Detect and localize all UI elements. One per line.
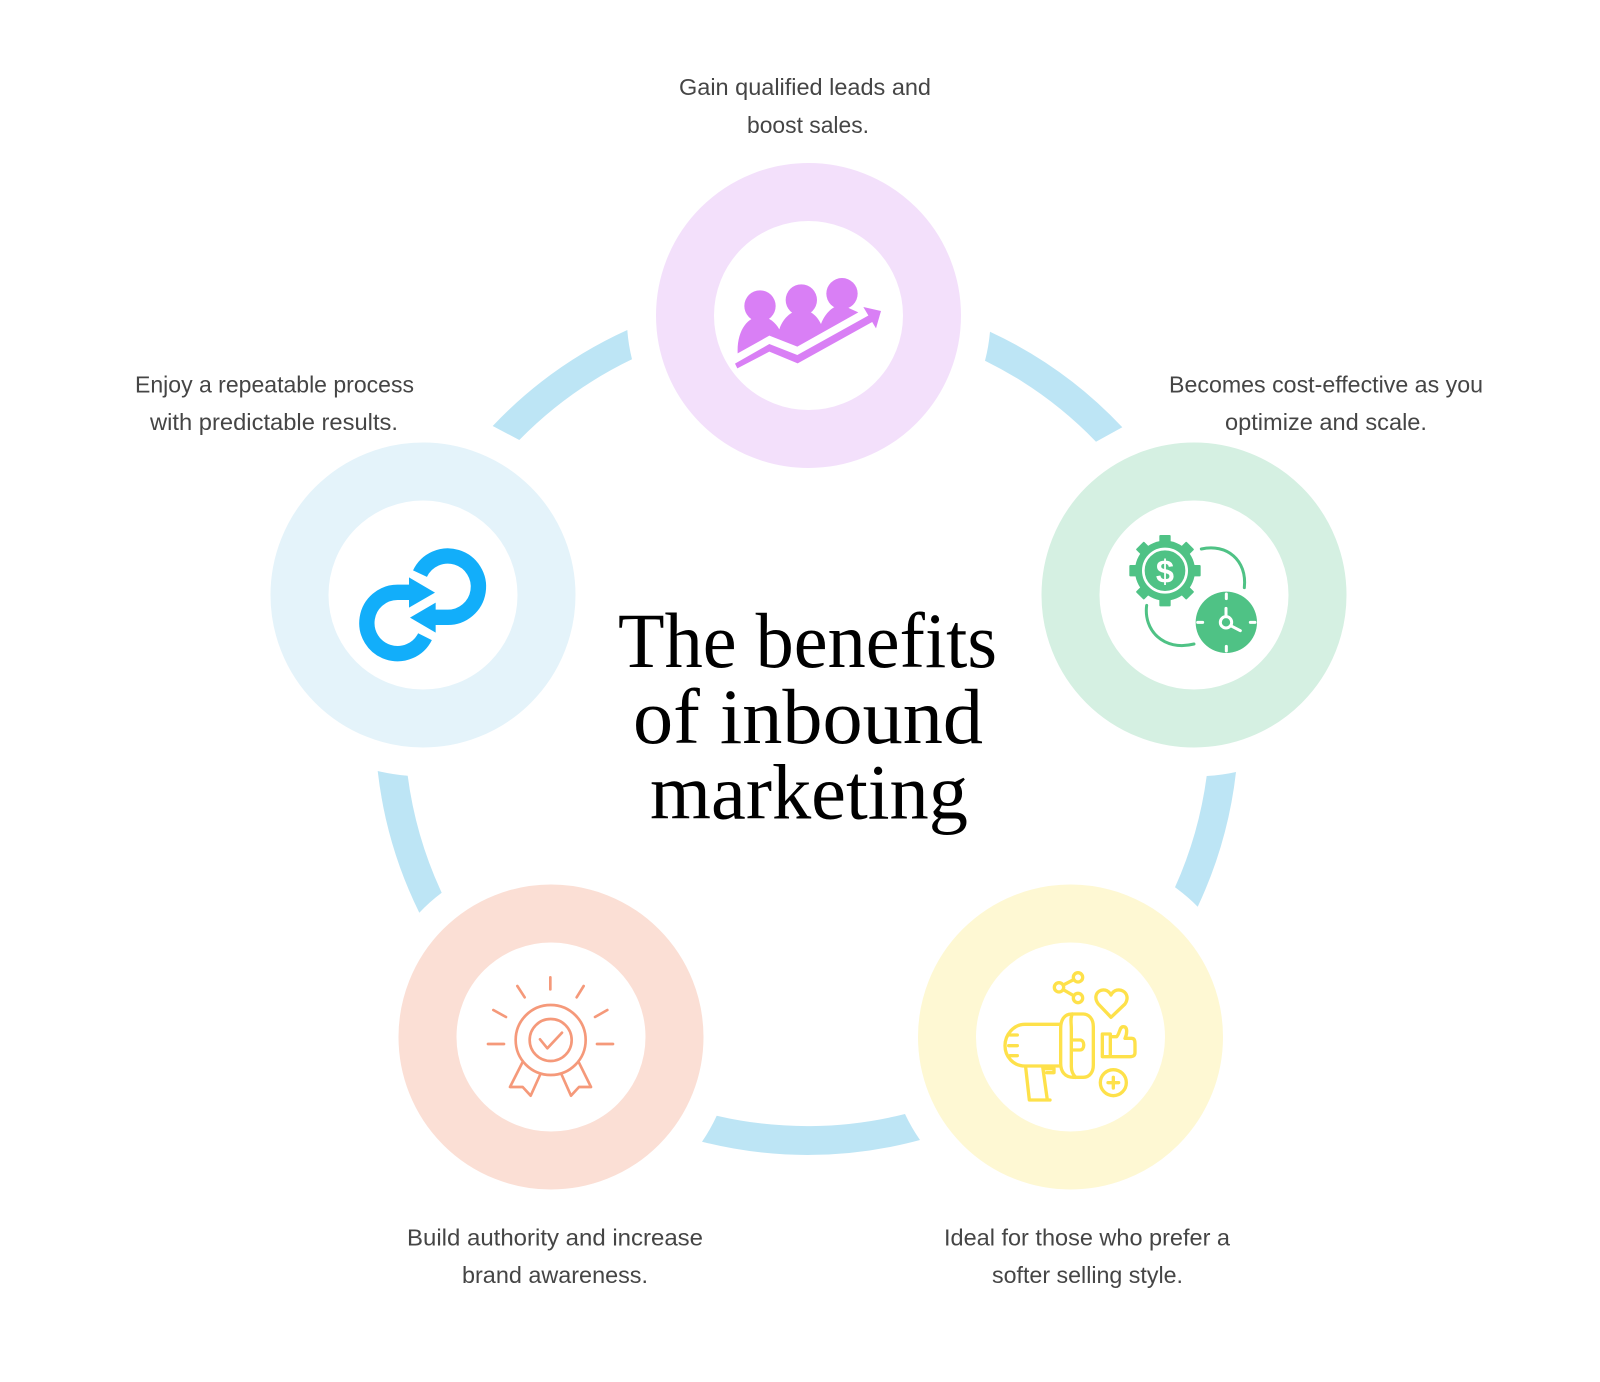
text: cost-effective [1169, 372, 1483, 435]
connector arcs [378, 330, 1236, 1155]
panel: qualified leads [679, 74, 932, 439]
text: qualified leads: boost sales. [747, 112, 869, 138]
text: softer selling [944, 1224, 1231, 1288]
text: cost-effective: optimize and scale. [1225, 409, 1427, 435]
ring: purple [685, 192, 932, 439]
text: repeatable process: with predictable results. [149, 409, 398, 435]
icon: gear and clock [1129, 535, 1257, 653]
title: marketing [650, 748, 968, 836]
arc: bottom left to left [378, 771, 442, 913]
ring: light blue [300, 472, 546, 718]
title: of inbound [633, 673, 983, 760]
text: qualified leads [679, 74, 931, 138]
arc: right to bottom right [1175, 772, 1236, 907]
arc: left to top [493, 330, 632, 440]
text: softer selling: softer selling style. [992, 1262, 1183, 1288]
text: brand authority: brand awareness. [462, 1262, 648, 1288]
text: cost-effective: Becomes cost-effective as you [1169, 372, 1483, 398]
ring: green [1070, 472, 1318, 718]
text: brand authority [407, 1224, 703, 1288]
panel: brand authority [407, 914, 703, 1288]
panel: repeatable process [135, 372, 546, 718]
panel: softer selling [944, 914, 1231, 1288]
ring: yellow [947, 914, 1194, 1160]
text: repeatable process [135, 372, 414, 435]
icon: looping arrows [367, 556, 478, 654]
title: The benefits [618, 597, 997, 684]
text: softer selling: Ideal for those who prefer a [944, 1224, 1231, 1250]
arc: bottom [702, 1114, 920, 1155]
icon: gear and clock: $ [1156, 552, 1174, 589]
text: repeatable process: Enjoy a repeatable process [135, 372, 414, 398]
ring: orange [428, 914, 674, 1160]
icon: people with rising arrow [735, 278, 881, 368]
arc: top to right [985, 332, 1122, 442]
title [618, 597, 997, 836]
panel: cost-effective [1070, 372, 1483, 718]
icon: megaphone with social symbols [1005, 973, 1135, 1100]
text: brand authority: Build authority and increase [407, 1224, 703, 1250]
icon: award rosette [488, 977, 613, 1096]
text: qualified leads: Gain qualified leads and [679, 74, 931, 100]
